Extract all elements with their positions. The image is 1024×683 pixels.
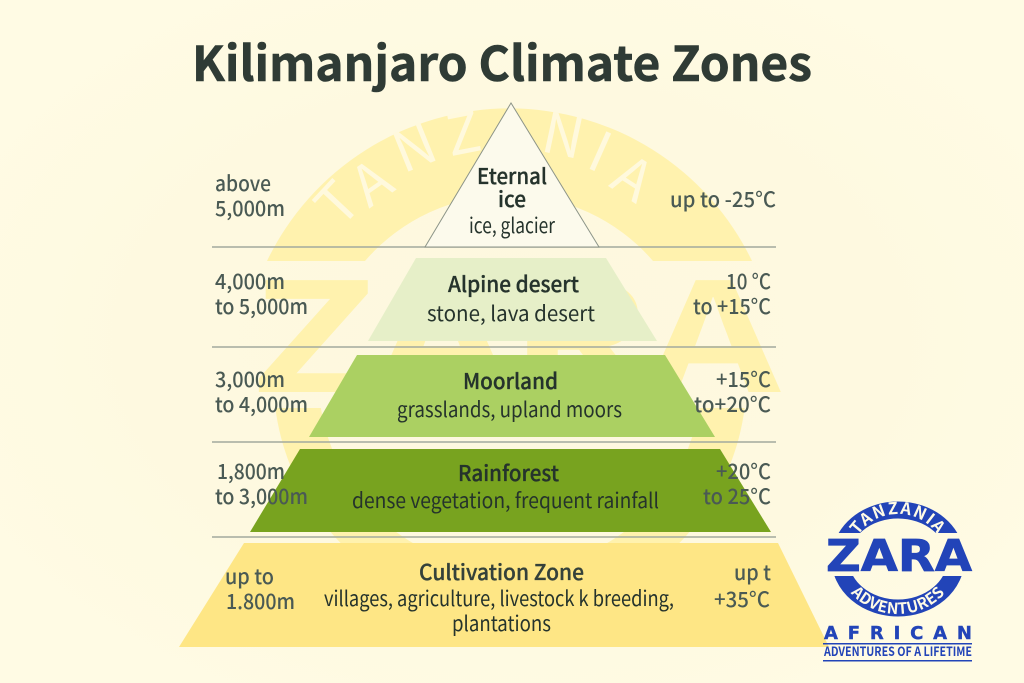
zone: Rainforest <box>250 449 771 532</box>
altitude labels: up to <box>225 561 274 591</box>
zone: Eternal ice <box>425 103 599 247</box>
altitude labels: to 4,000m <box>215 389 308 419</box>
zone: Moorland: grasslands, upland moors <box>397 394 622 424</box>
logo: Zara Tanzania Adventures <box>823 502 972 662</box>
zone: Cultivation Zone: plantations <box>452 608 551 638</box>
watermark: Tanzania Zara emblem <box>258 108 781 543</box>
watermark: Tanzania Zara emblem: A <box>598 132 671 219</box>
zone: Eternal ice: Eternal <box>477 160 547 191</box>
zone: Alpine desert: Alpine desert <box>448 268 579 299</box>
altitude labels: to 5,000m <box>215 291 308 321</box>
altitude labels: 4,000m <box>215 266 285 296</box>
zone: Moorland <box>309 355 715 437</box>
temperature labels: to 25°C <box>703 481 771 511</box>
zone: Alpine desert <box>368 258 657 341</box>
watermark: Tanzania Zara emblem: Z <box>438 87 487 173</box>
logo: Zara Tanzania Adventures: TANZANIA <box>848 502 944 533</box>
logo: Zara Tanzania Adventures: ADVENTURES <box>850 586 944 614</box>
zone: Cultivation Zone <box>179 543 829 647</box>
altitude labels: above <box>215 168 271 198</box>
altitude labels: to 3,000m <box>215 481 308 511</box>
zone: Rainforest: dense vegetation, frequent rainfall <box>352 485 659 515</box>
logo: Zara Tanzania Adventures: ADVENTURES OF A LIFETIME <box>823 641 972 660</box>
watermark: Tanzania Zara emblem: A <box>332 137 407 223</box>
watermark: Tanzania Zara emblem: I <box>578 108 626 189</box>
zone: Cultivation Zone: villages, agriculture, livestock k breeding, <box>324 583 674 613</box>
divider lines <box>212 247 776 537</box>
zone: Alpine desert: stone, lava desert <box>427 298 595 328</box>
watermark: Tanzania Zara emblem: N <box>379 99 447 189</box>
logo: Zara Tanzania Adventures: ZARA <box>826 531 972 582</box>
zone: Moorland: Moorland <box>463 365 558 396</box>
zone: Cultivation Zone: Cultivation Zone <box>419 556 584 587</box>
temperature labels: 10 °C <box>726 266 771 296</box>
watermark: Tanzania Zara emblem: N <box>536 88 592 176</box>
temperature labels: to+20°C <box>694 389 771 419</box>
temperature labels: up to -25°C <box>670 184 776 214</box>
watermark: Tanzania Zara emblem: T <box>294 161 376 241</box>
logo: Zara Tanzania Adventures: AFRICAN <box>824 623 972 644</box>
temperature labels: +20°C <box>716 456 771 486</box>
temperature labels: +35°C <box>714 584 770 614</box>
temperature labels <box>670 184 776 614</box>
zone: Eternal ice: ice, glacier <box>469 210 556 240</box>
zone: Eternal ice: ice <box>498 183 526 214</box>
title: Kilimanjaro Climate Zones <box>192 25 812 95</box>
altitude labels: 1,800m <box>217 456 285 486</box>
altitude labels <box>215 168 308 616</box>
temperature labels: +15°C <box>716 364 771 394</box>
watermark: Tanzania Zara emblem: ZARA <box>250 218 782 436</box>
temperature labels: up t <box>734 557 771 587</box>
altitude labels: 5,000m <box>215 193 285 223</box>
altitude labels: 3,000m <box>215 364 285 394</box>
temperature labels: to +15°C <box>693 291 771 321</box>
zone: Rainforest: Rainforest <box>458 457 559 488</box>
altitude labels: 1.800m <box>226 586 295 616</box>
